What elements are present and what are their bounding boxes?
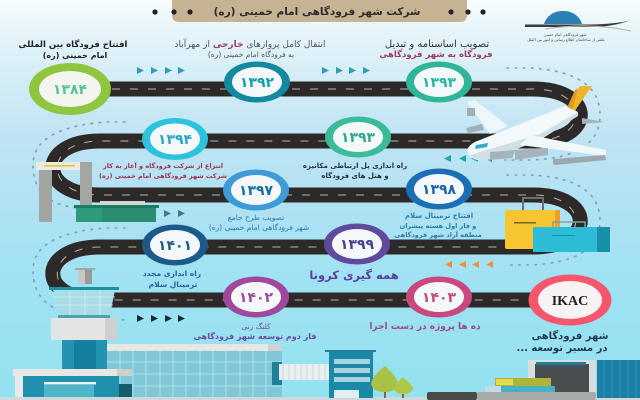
- office building: [325, 350, 376, 398]
- milestone 1399: ۱۳۹۹: [340, 237, 375, 253]
- airplane: [466, 86, 606, 165]
- text: 1394: انتزاع از شرکت فرودگاه و آغاز به کار: [102, 161, 223, 170]
- text: 1401: ترمینال سلام: [149, 280, 198, 289]
- arrows: row 5: [137, 315, 185, 322]
- milestone 1402: ۱۴۰۲: [239, 290, 274, 306]
- milestone 1399: [324, 224, 390, 264]
- logo: IKAC: [525, 11, 631, 42]
- text: 1392: [175, 38, 325, 59]
- title banner: [152, 0, 486, 22]
- text: 1397: تصویب طرح جامع: [228, 213, 284, 222]
- text: 1393: تصویب اساسنامه و تبدیل: [385, 39, 489, 50]
- IKAC badge: [528, 274, 612, 326]
- trees: [371, 366, 413, 398]
- text: 1394: [99, 161, 227, 180]
- milestone 1384: [29, 63, 111, 115]
- text: 1398: افتتاح ترمینال سلام: [405, 212, 473, 220]
- text: IKAC: شهر فرودگاهی: [532, 329, 609, 342]
- milestone 1392: ۱۳۹۲: [240, 75, 275, 91]
- text: 1393 second: و هتل های فرودگاه: [321, 171, 389, 180]
- icon: luggage: [505, 198, 610, 252]
- text: 1394: شرکت شهر فرودگاهی امام خمینی (ره): [99, 172, 227, 180]
- text: 1401: [143, 269, 201, 289]
- text: 1398: منطقه آزاد شهر فرودگاهی: [394, 230, 482, 239]
- text: 1393 second: راه اندازی پل ارتباطی مکانیزه: [303, 162, 407, 170]
- arrows: row 4: [445, 261, 493, 268]
- logo: IKAC: شهر فرودگاهی امام خمینی: [544, 32, 586, 37]
- text: IKAC: در مسیر توسعه ...: [517, 343, 607, 354]
- text: 1402: [194, 322, 316, 341]
- terminal building: [0, 344, 640, 400]
- road: [53, 89, 580, 300]
- text: 1402: فاز دوم توسعه شهر فرودگاهی: [194, 331, 316, 341]
- text: 1384: [19, 39, 128, 60]
- title banner: شرکت شهر فرودگاهی امام خمینی (ره): [214, 5, 420, 18]
- text: 1384: امام خمینی (ره): [43, 51, 108, 60]
- logo: IKAC: علمی از ساخاتمان اطلاع رسانی و امور بین الملل: [527, 37, 605, 42]
- text: 1392: انتقال کامل پروازهای خارجی از مهرآباد: [175, 38, 325, 50]
- milestone 1384: ۱۳۸۴: [53, 82, 88, 98]
- arrows: row 1: [137, 67, 370, 74]
- milestone 1397: [223, 170, 289, 210]
- milestone 1394: ۱۳۹۴: [158, 132, 193, 148]
- text: 1397: شهر فرودگاهی امام خمینی (ره): [209, 223, 309, 232]
- text: 1393: [379, 39, 493, 60]
- text: 1384: افتتاح فرودگاه بین المللی: [19, 39, 128, 50]
- milestone 1397: ۱۳۹۷: [239, 183, 274, 199]
- milestone 1393 second: ۱۳۹۳: [341, 130, 376, 146]
- milestone 1398: [406, 168, 472, 210]
- dotted flight paths: [33, 68, 600, 320]
- milestone 1392: [224, 62, 290, 102]
- milestone 1403: ۱۴۰۳: [422, 290, 457, 306]
- baggage scanner: [427, 360, 640, 400]
- milestone 1401: ۱۴۰۱: [158, 238, 192, 254]
- milestone 1393: ۱۳۹۳: [422, 75, 457, 91]
- text: 1398: [394, 212, 482, 239]
- milestone 1398: ۱۳۹۸: [422, 182, 457, 198]
- milestone 1393: [406, 62, 472, 102]
- IKAC badge: IKAC: [552, 294, 588, 309]
- milestone 1403: [406, 276, 472, 318]
- text: 1403: ده ها پروژه در دست اجرا: [369, 322, 481, 332]
- icon: security gate: [36, 162, 159, 222]
- text: 1399: همه گیری کرونا: [309, 268, 399, 283]
- arrows: row 3: [164, 210, 185, 217]
- arrows: row 2: [444, 155, 492, 162]
- milestone 1402: [223, 276, 289, 318]
- milestone 1393 second: [325, 116, 391, 158]
- text: 1401: راه اندازی مجدد: [143, 269, 201, 278]
- text: 1402: کلنگ زنی: [241, 322, 271, 331]
- milestone 1394: [142, 118, 208, 160]
- text: IKAC: [517, 329, 609, 354]
- text: 1398: و فاز اول هسته پیشران: [400, 222, 476, 230]
- text: 1392: به فرودگاه امام خمینی (ره): [208, 50, 294, 59]
- text: 1393 second: [303, 162, 407, 180]
- text: 1397: [209, 213, 309, 232]
- text: 1393: فرودگاه به شهر فرودگاهی: [379, 49, 493, 60]
- icon: control tower: [49, 268, 119, 369]
- milestone 1401: [142, 224, 208, 266]
